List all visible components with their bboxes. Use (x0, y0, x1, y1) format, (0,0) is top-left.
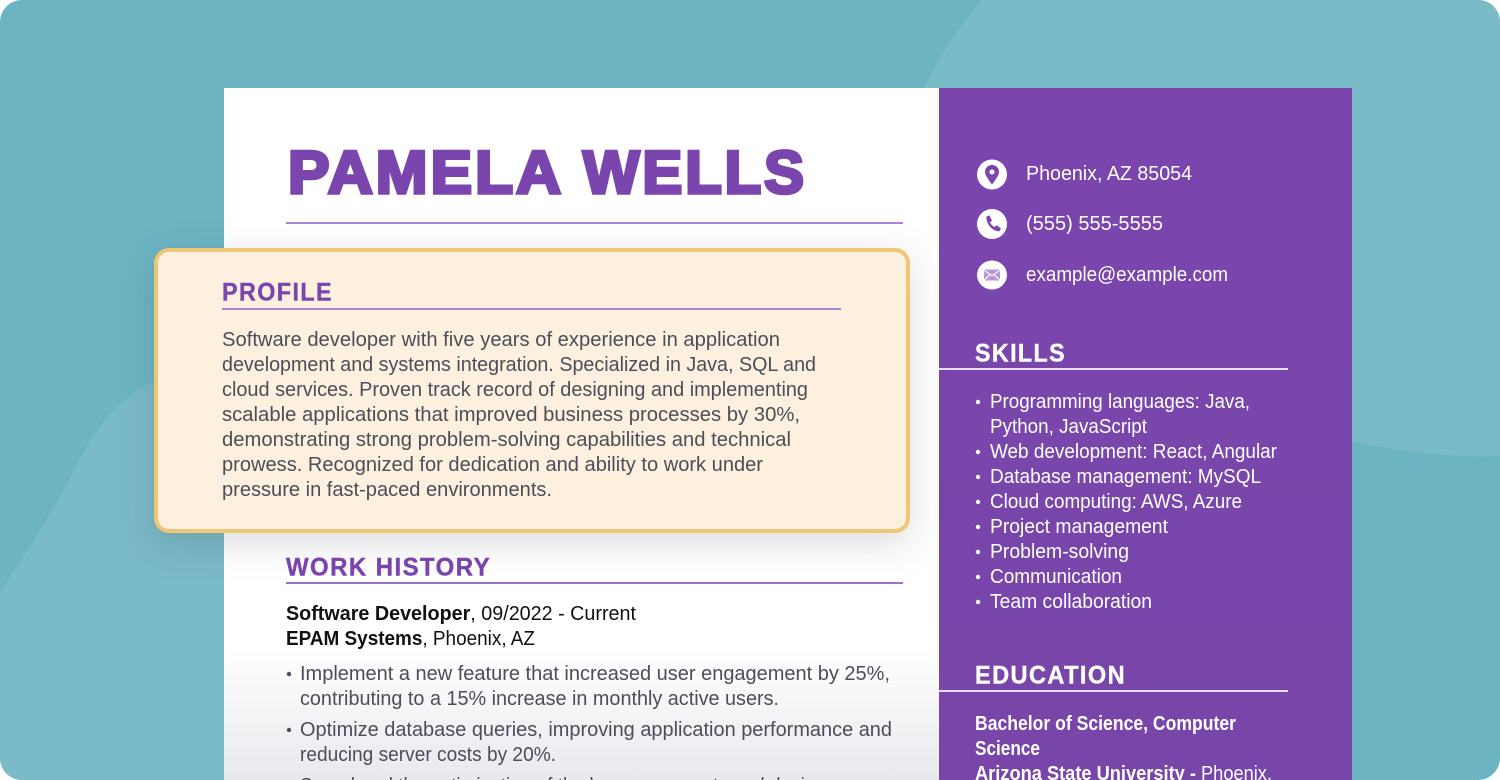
skills heading: SKILLS (975, 340, 1066, 368)
resume page: purple sidebar (939, 88, 1352, 780)
job bullets (287, 663, 892, 780)
contact: email: example@example.com (1026, 264, 1228, 286)
panel: skills (939, 340, 1288, 613)
profile paragraph: development and systems integration. Specialized in Java, SQL and (222, 354, 816, 376)
panel: education (939, 662, 1288, 780)
job bullets: contributing to a 15% increase in monthly active users. (300, 688, 779, 710)
job bullets: Implement a new feature that increased user engagement by 25%, (300, 663, 890, 685)
work history rule (286, 582, 903, 584)
name heading (288, 139, 807, 206)
profile paragraph: Software developer with five years of experience in application (222, 329, 780, 351)
skills list (976, 391, 1277, 613)
profile paragraph: prowess. Recognized for dedication and ability to work under (222, 454, 763, 476)
profile paragraph: pressure in fast-paced environments. (222, 479, 552, 501)
resume page: left column (224, 88, 939, 780)
name heading: PAMELA (288, 139, 564, 206)
profile paragraph: scalable applications that improved business processes by 30%, (222, 404, 800, 426)
icon: envelope (977, 260, 1007, 290)
profile rule (222, 308, 841, 310)
icon: location pin (977, 160, 1007, 190)
name rule (286, 222, 903, 224)
profile paragraph (222, 329, 816, 501)
education details: Bachelor of Science, Computer (975, 713, 1236, 735)
job title: Software Developer, 09/2022 - Current (286, 603, 636, 625)
work history heading: WORK HISTORY (286, 554, 491, 582)
skills list: Cloud computing: AWS, Azure (990, 491, 1242, 513)
name heading: WELLS (583, 139, 807, 206)
job bullets: Optimize database queries, improving application performance and (300, 719, 892, 741)
panel: contact details (977, 160, 1228, 290)
card box (156, 250, 908, 531)
skills list: Database management: MySQL (990, 466, 1261, 488)
skills list: Project management (990, 516, 1168, 538)
profile paragraph: cloud services. Proven track record of designing and implementing (222, 379, 808, 401)
contact: phone: (555) 555-5555 (1026, 213, 1163, 235)
skills rule (939, 368, 1288, 370)
panel: work history (286, 554, 903, 780)
icon: phone (977, 209, 1007, 239)
skills list: Team collaboration (990, 591, 1152, 613)
skills list: Web development: React, Angular (990, 441, 1277, 463)
skills list: Programming languages: Java, (990, 391, 1250, 413)
education details (975, 713, 1272, 780)
skills list: Problem-solving (990, 541, 1129, 563)
skills list: Python, JavaScript (990, 416, 1147, 438)
job bullets: reducing server costs by 20%. (300, 744, 556, 766)
employer: EPAM Systems, Phoenix, AZ (286, 628, 535, 650)
education rule (939, 690, 1288, 692)
education heading: EDUCATION (975, 662, 1126, 690)
education details: Science (975, 738, 1040, 760)
profile heading: PROFILE (222, 278, 333, 306)
profile paragraph: demonstrating strong problem-solving capabilities and technical (222, 429, 791, 451)
skills list: Communication (990, 566, 1122, 588)
contact: address: Phoenix, AZ 85054 (1026, 163, 1192, 185)
panel: highlighted profile card (156, 250, 908, 531)
